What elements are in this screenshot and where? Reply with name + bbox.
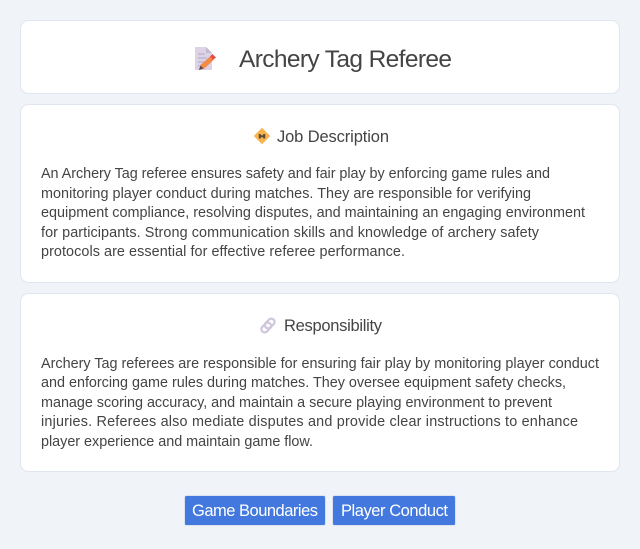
text block: job description: An Archery Tag referee ensures safety and fair play by enforcing game rules and xyxy=(41,166,550,182)
heading: job description: Job Description xyxy=(277,128,389,146)
icon: chain link xyxy=(260,317,276,334)
text block: job description: monitoring player conduct during matches. They are responsible for verifying xyxy=(41,186,531,202)
text block: job description: protocols are essential for effective referee performance. xyxy=(41,244,405,260)
icon: document with pencil xyxy=(195,47,216,70)
button: player conduct xyxy=(332,496,456,526)
title: Archery Tag Referee xyxy=(239,46,452,73)
panel: job description xyxy=(20,104,620,282)
text block: responsibility xyxy=(41,356,599,450)
button: game boundaries xyxy=(184,496,326,526)
text block: job description xyxy=(41,166,585,260)
text block: job description: equipment compliance, resolving disputes, and maintaining an engaging environment xyxy=(41,205,585,221)
text block: responsibility: player experience and maintain game flow. xyxy=(41,434,313,450)
button: player conduct: Player Conduct xyxy=(341,502,448,520)
heading: responsibility: Responsibility xyxy=(284,317,383,335)
text block: responsibility: Archery Tag referees are responsible for ensuring fair play by monitoring player conduct xyxy=(41,356,599,372)
text block: job description: for participants. Strong communication skills and knowledge of archery safety xyxy=(41,225,540,241)
text block: responsibility: injuries. Referees also mediate disputes and provide clear instructions to enhance xyxy=(41,414,578,430)
panel: title card xyxy=(20,20,620,94)
panel: responsibility xyxy=(20,294,620,472)
icon: orange diamond sign xyxy=(254,128,270,144)
text block: responsibility: and enforcing game rules during matches. They oversee equipment safety checks, xyxy=(41,375,566,391)
text block: responsibility: manage scoring accuracy, and maintain a secure playing environment to prevent xyxy=(41,395,552,411)
button: game boundaries: Game Boundaries xyxy=(192,502,318,520)
